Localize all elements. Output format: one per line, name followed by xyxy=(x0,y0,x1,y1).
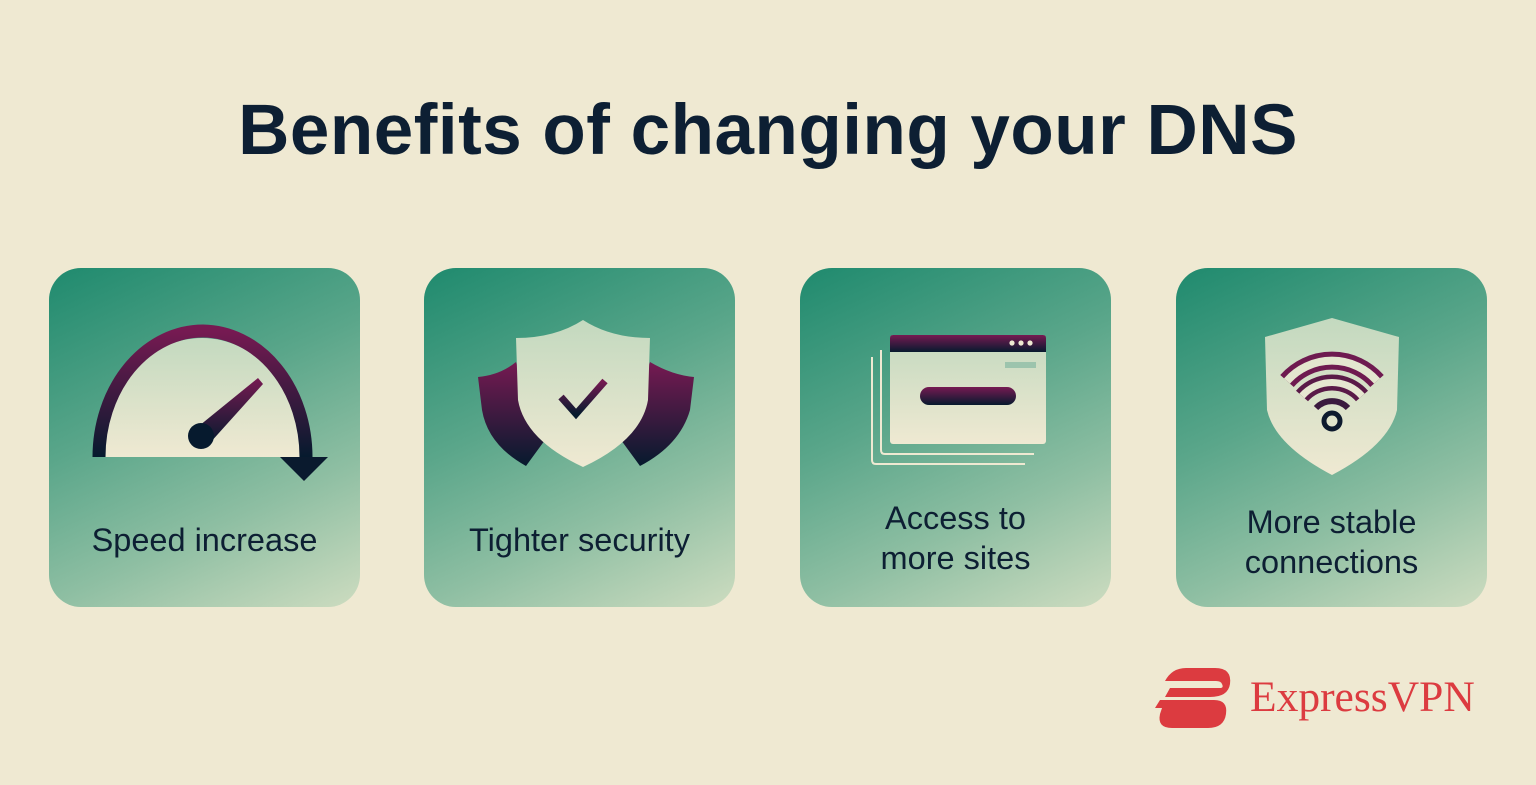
icon: shields with check xyxy=(478,320,694,467)
label: More stable xyxy=(1247,504,1416,540)
label: more sites xyxy=(881,540,1030,576)
label xyxy=(1245,504,1418,580)
title: Benefits of changing your DNS xyxy=(238,91,1298,170)
panel: speed increase xyxy=(49,268,360,607)
label xyxy=(881,500,1030,576)
brand name: ExpressVPN xyxy=(1250,673,1475,721)
icon: speedometer xyxy=(92,324,328,481)
label: Tighter security xyxy=(469,522,690,558)
icon: shield with wifi xyxy=(1265,318,1399,475)
icon: logo mark xyxy=(1155,668,1230,728)
label: Speed increase xyxy=(92,522,317,558)
panel: more stable connections xyxy=(1176,268,1487,607)
panel: tighter security xyxy=(424,268,735,607)
label: connections xyxy=(1245,544,1418,580)
panel: access to more sites xyxy=(800,268,1111,607)
label: Access to xyxy=(885,500,1026,536)
icon: browser windows xyxy=(871,335,1046,465)
logo: ExpressVPN xyxy=(1155,668,1475,728)
